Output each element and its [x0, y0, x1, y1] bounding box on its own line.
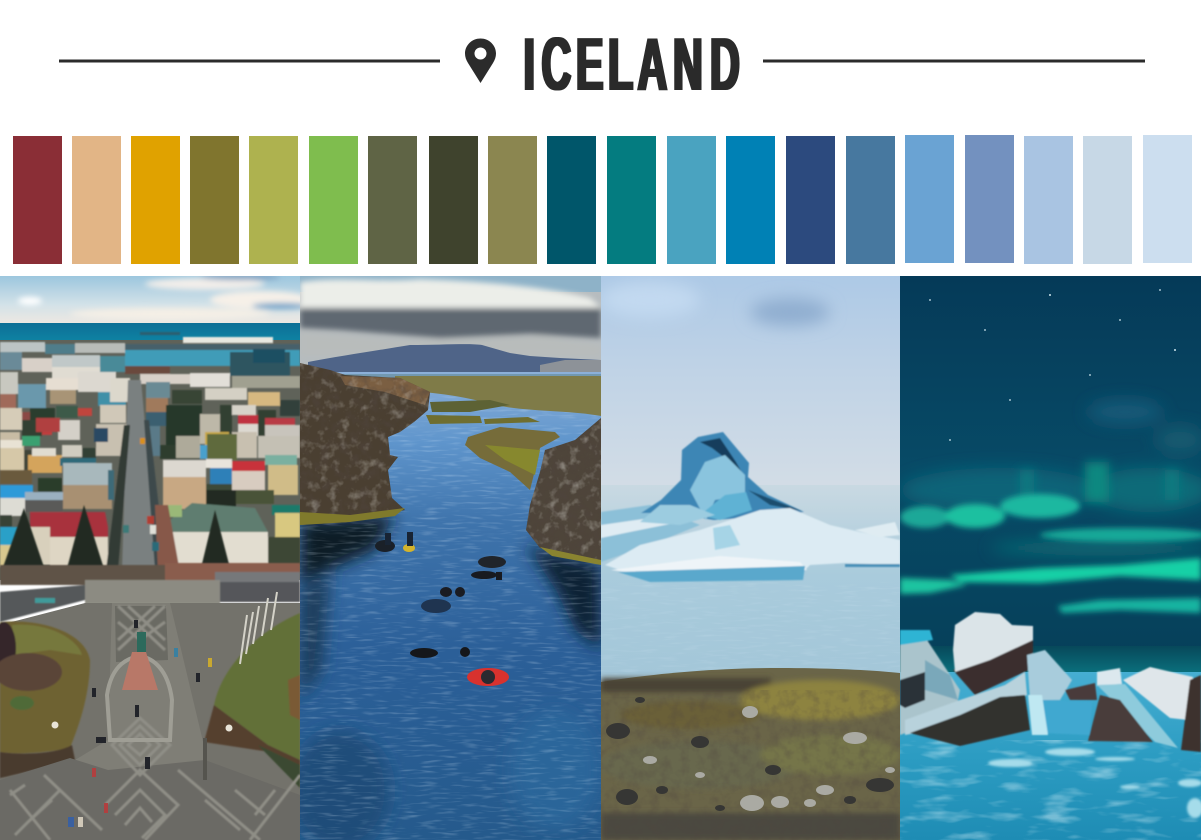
- icon: location pin: [465, 38, 496, 83]
- photo: Reykjavik city view: [0, 274, 310, 840]
- photo: northern lights over ice: [900, 276, 1201, 840]
- photo strip: [0, 276, 1201, 840]
- title text: ICELAND: [523, 22, 740, 106]
- photo: Silfra fissure with snorkelers: [290, 276, 601, 840]
- photo: iceberg on the lagoon: [600, 276, 900, 840]
- title: [59, 22, 1145, 106]
- palette: colour swatches: [13, 135, 1192, 264]
